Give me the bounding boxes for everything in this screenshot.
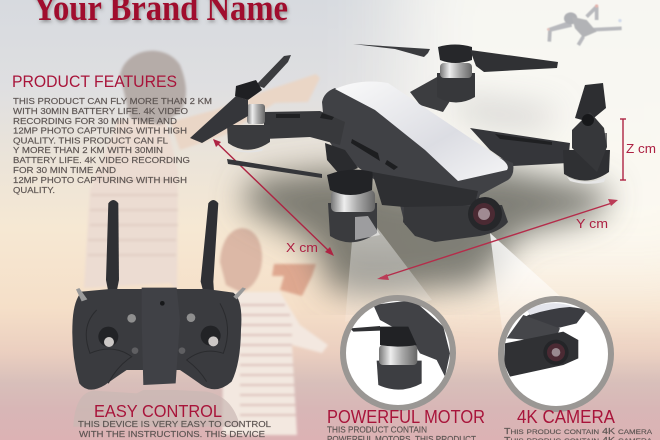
controller <box>72 200 246 427</box>
text block: product features: QUALITY. THIS PRODUCT CAN FL <box>13 136 169 146</box>
text block: easy control: WITH THE INSTRUCTIONS. THIS DEVICE <box>79 430 265 439</box>
child's striped body <box>222 292 328 435</box>
white shell <box>335 81 508 181</box>
tablet in child's hands <box>272 264 316 296</box>
joysticks <box>98 327 118 347</box>
text block: product features: BATTERY LIFE. 4K VIDEO RECORDING <box>13 156 190 165</box>
rear arm <box>410 77 457 112</box>
dimension arrow: X <box>213 139 334 256</box>
man's torso <box>84 118 178 290</box>
gimbal and camera <box>403 197 508 242</box>
dimension label: Y: Y cm <box>576 217 608 231</box>
child's head <box>220 228 262 292</box>
heading: powerful motor: POWERFUL MOTOR <box>327 407 485 427</box>
body <box>72 289 241 390</box>
text block: product features: QUALITY. <box>13 186 55 195</box>
front motor <box>327 170 377 242</box>
text block: easy control: THIS DEVICE IS VERY EASY TO CONTROL <box>78 420 272 429</box>
heading: product features: PRODUCT FEATURES <box>12 72 177 91</box>
antennas <box>106 200 119 292</box>
text block: 4K camera <box>504 427 652 440</box>
left motor and propeller <box>190 55 291 152</box>
text block: product features: FOR 30 MIN TIME AND <box>13 166 116 175</box>
light beam: camera <box>490 233 562 336</box>
text block: product features: RECORDING FOR 30 MIN TIME AND <box>13 117 177 126</box>
buttons <box>127 314 136 323</box>
text block: product features: THIS PRODUCT CAN FLY MORE THAN 2 KM <box>13 97 212 106</box>
light beam: motor <box>345 216 432 322</box>
text block: powerful motor: THIS PRODUCT CONTAIN <box>327 426 427 434</box>
dimension arrow: Y <box>377 199 618 280</box>
heading: easy control: EASY CONTROL <box>94 401 222 421</box>
text block: product features: 12MP PHOTO CAPTURING WITH HIGH <box>13 176 187 185</box>
drone <box>190 44 610 242</box>
inset circle: motor <box>343 298 453 408</box>
ground shadow under drone <box>240 95 610 295</box>
text block: product features <box>13 97 212 195</box>
background photo: man and child <box>84 51 328 435</box>
right arm <box>470 128 570 166</box>
body underside <box>322 88 513 225</box>
dimension arrow: Z <box>620 119 626 180</box>
inset circle: 4K camera <box>501 299 611 409</box>
motor beam over cup <box>355 216 380 240</box>
left arm <box>264 111 345 145</box>
switches <box>76 288 87 301</box>
heading: 4K camera: 4K CAMERA <box>517 407 615 427</box>
controller reflection <box>73 390 240 427</box>
front propeller <box>227 159 478 210</box>
dimension label: X: X cm <box>286 241 318 255</box>
text block: product features: 12MP PHOTO CAPTURING WITH HIGH <box>13 126 187 136</box>
mini drone in the sky <box>547 4 622 45</box>
clip <box>142 288 180 385</box>
rear motor <box>353 44 558 102</box>
man's head <box>120 51 186 125</box>
text block: easy control <box>78 420 272 439</box>
man's pointing arm <box>170 74 320 150</box>
body side vents <box>325 139 398 175</box>
dimension label: Z: Z cm <box>626 142 656 156</box>
text block: product features: WITH 30MIN BATTERY LIFE. 4K VIDEO <box>13 107 188 116</box>
right motor and propeller <box>563 83 610 184</box>
text block: powerful motor <box>327 426 476 440</box>
text block: 4K camera: This produc contain 4K camera <box>504 427 652 436</box>
text block: product features: Y MORE THAN 2 KM WITH 30MIN <box>13 146 163 155</box>
